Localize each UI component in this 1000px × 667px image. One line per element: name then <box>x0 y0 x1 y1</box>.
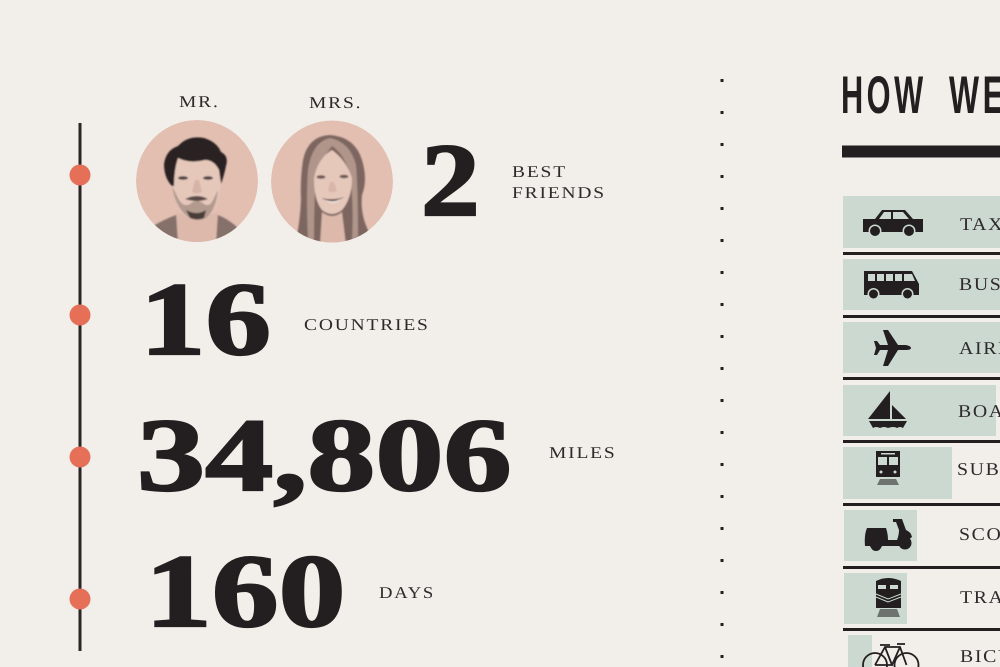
stat: 34,806: 34,806 <box>137 398 512 513</box>
stat: 160: 160 <box>145 534 345 649</box>
row: bicycle <box>848 635 1000 667</box>
stat: 16: 16 <box>140 262 271 377</box>
stat: 2: 2 <box>421 123 480 238</box>
row: airplane <box>843 322 1000 373</box>
row: taxi <box>843 196 1000 248</box>
heading: HOW <box>841 66 927 125</box>
label: miles: MILES <box>549 443 617 462</box>
portrait: Mrs. <box>271 120 393 248</box>
label: Mr.: MR. <box>179 92 220 111</box>
dotted divider <box>720 79 724 658</box>
label: days: DAYS <box>379 583 435 602</box>
row: train <box>844 573 1000 624</box>
row: boat <box>843 385 1000 436</box>
row: scooter <box>844 510 1000 561</box>
label: countries: COUNTRIES <box>304 315 430 334</box>
label: Mrs.: MRS. <box>309 93 362 112</box>
label: best friends: FRIENDS <box>512 183 606 202</box>
row: bus <box>843 259 1000 310</box>
timeline <box>70 123 90 651</box>
row: subway <box>843 447 1000 499</box>
heading <box>841 66 1000 125</box>
portrait: Mr. <box>136 120 258 245</box>
label: best friends <box>512 162 606 202</box>
label: best friends: BEST <box>512 162 567 181</box>
heading rule <box>842 146 1000 158</box>
